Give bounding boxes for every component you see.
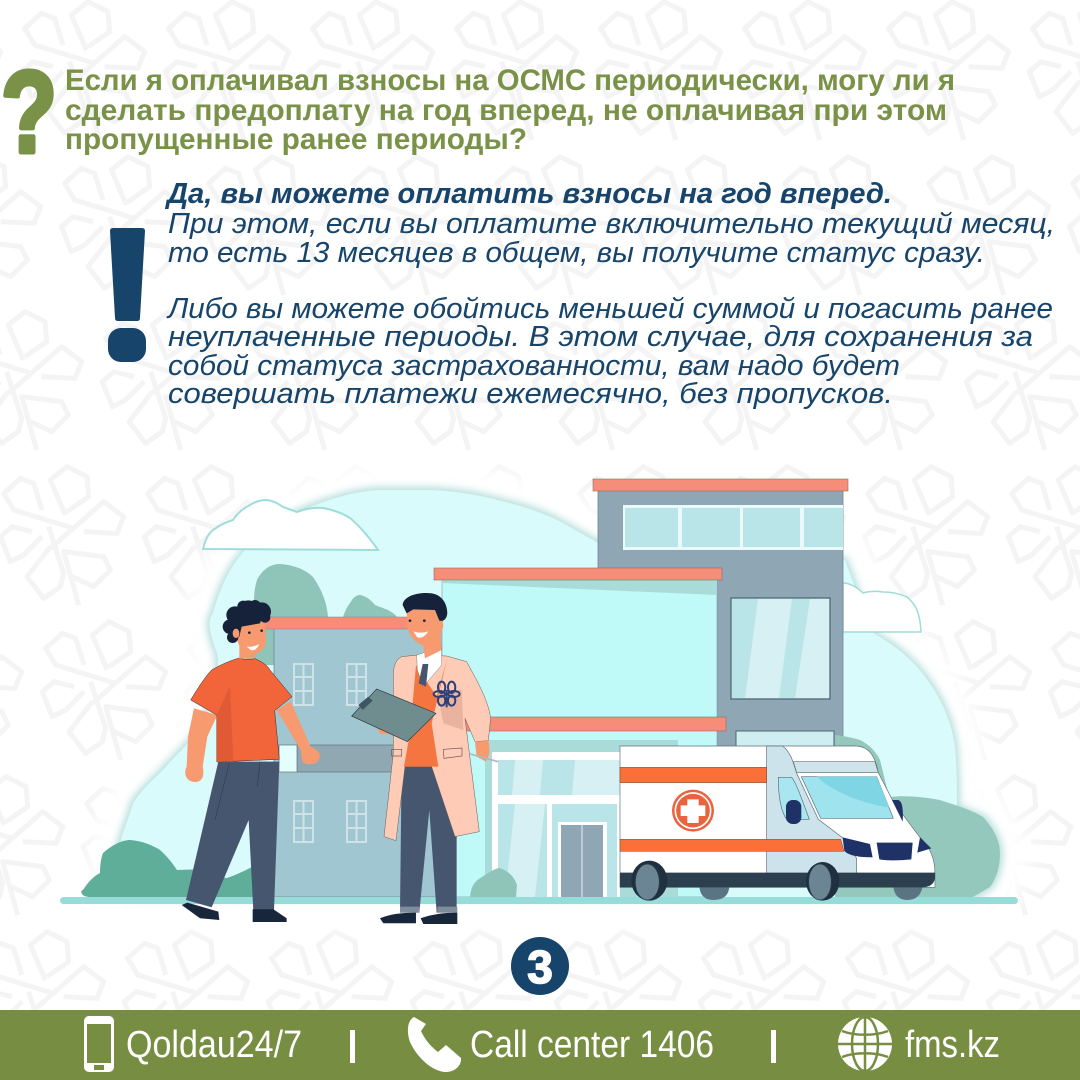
small bush	[470, 868, 517, 897]
heading question: пропущенные ранее периоды?	[65, 123, 527, 156]
answer text: неуплаченные периоды. В этом случае, для сохранения за	[168, 321, 1033, 353]
teal trees behind	[245, 564, 397, 665]
windshield	[801, 777, 893, 818]
icon: telephone handset	[408, 1017, 461, 1072]
bumper	[620, 873, 935, 887]
front wheels	[631, 861, 839, 901]
mirrors	[786, 800, 801, 824]
ground line	[60, 897, 1018, 904]
ambulance	[620, 746, 935, 901]
answer text: собой статуса застрахованности, вам надо будет	[168, 350, 900, 382]
white halo around scene	[117, 490, 1000, 897]
van body	[620, 746, 935, 887]
right bush	[835, 735, 1000, 897]
heading question	[65, 64, 955, 156]
clipboard	[352, 689, 436, 742]
people	[182, 593, 498, 924]
cloud left	[203, 500, 378, 550]
medical cross emblem	[672, 790, 714, 832]
coat emblem	[434, 682, 460, 707]
patient in orange shirt	[182, 600, 320, 922]
van rear wheels	[699, 887, 729, 900]
answer text: то есть 13 месяцев в общем, вы получите статус сразу.	[168, 237, 985, 269]
answer text: совершать платежи ежемесячно, без пропусков.	[168, 378, 893, 410]
orange stripes	[620, 767, 767, 783]
answer text: Да, вы можете оплатить взносы на год вперед.	[164, 178, 892, 210]
heading question: сделать предоплату на год вперед, не оплачивая при этом	[65, 94, 947, 127]
answer text	[164, 178, 1055, 410]
left bush	[81, 840, 270, 897]
question mark icon: ?	[1, 47, 57, 177]
background blob	[117, 490, 1000, 897]
page number badge	[511, 937, 569, 995]
answer text: При этом, если вы оплатите включительно текущий месяц,	[168, 208, 1055, 240]
page number badge: 3	[527, 941, 553, 993]
divider left	[350, 1030, 355, 1063]
footer text: website: fms.kz	[905, 1024, 1000, 1066]
tall building	[593, 479, 848, 760]
exclamation mark icon	[108, 228, 146, 362]
doctor in coat	[352, 593, 498, 924]
answer text: Либо вы можете обойтись меньшей суммой и погасить ранее	[166, 293, 1053, 325]
divider right	[771, 1030, 776, 1063]
footer text: Qoldau: Qoldau24/7	[126, 1024, 302, 1066]
glass entrance	[492, 752, 620, 897]
cloud right	[843, 583, 921, 632]
illustration: hospital scene	[60, 479, 1018, 924]
soft teal shadow	[117, 490, 1000, 897]
footer text: call center: Call center 1406	[470, 1024, 714, 1066]
headlights and grille	[843, 837, 873, 857]
footer bar	[0, 1010, 1080, 1080]
curly hair	[223, 600, 271, 643]
middle building	[434, 568, 726, 897]
icon: globe	[838, 1017, 892, 1071]
heading question: Если я оплачивал взносы на ОСМС периодически, могу ли я	[65, 64, 955, 97]
side window	[778, 777, 809, 819]
icon: smartphone	[84, 1016, 114, 1072]
left building	[263, 617, 449, 897]
